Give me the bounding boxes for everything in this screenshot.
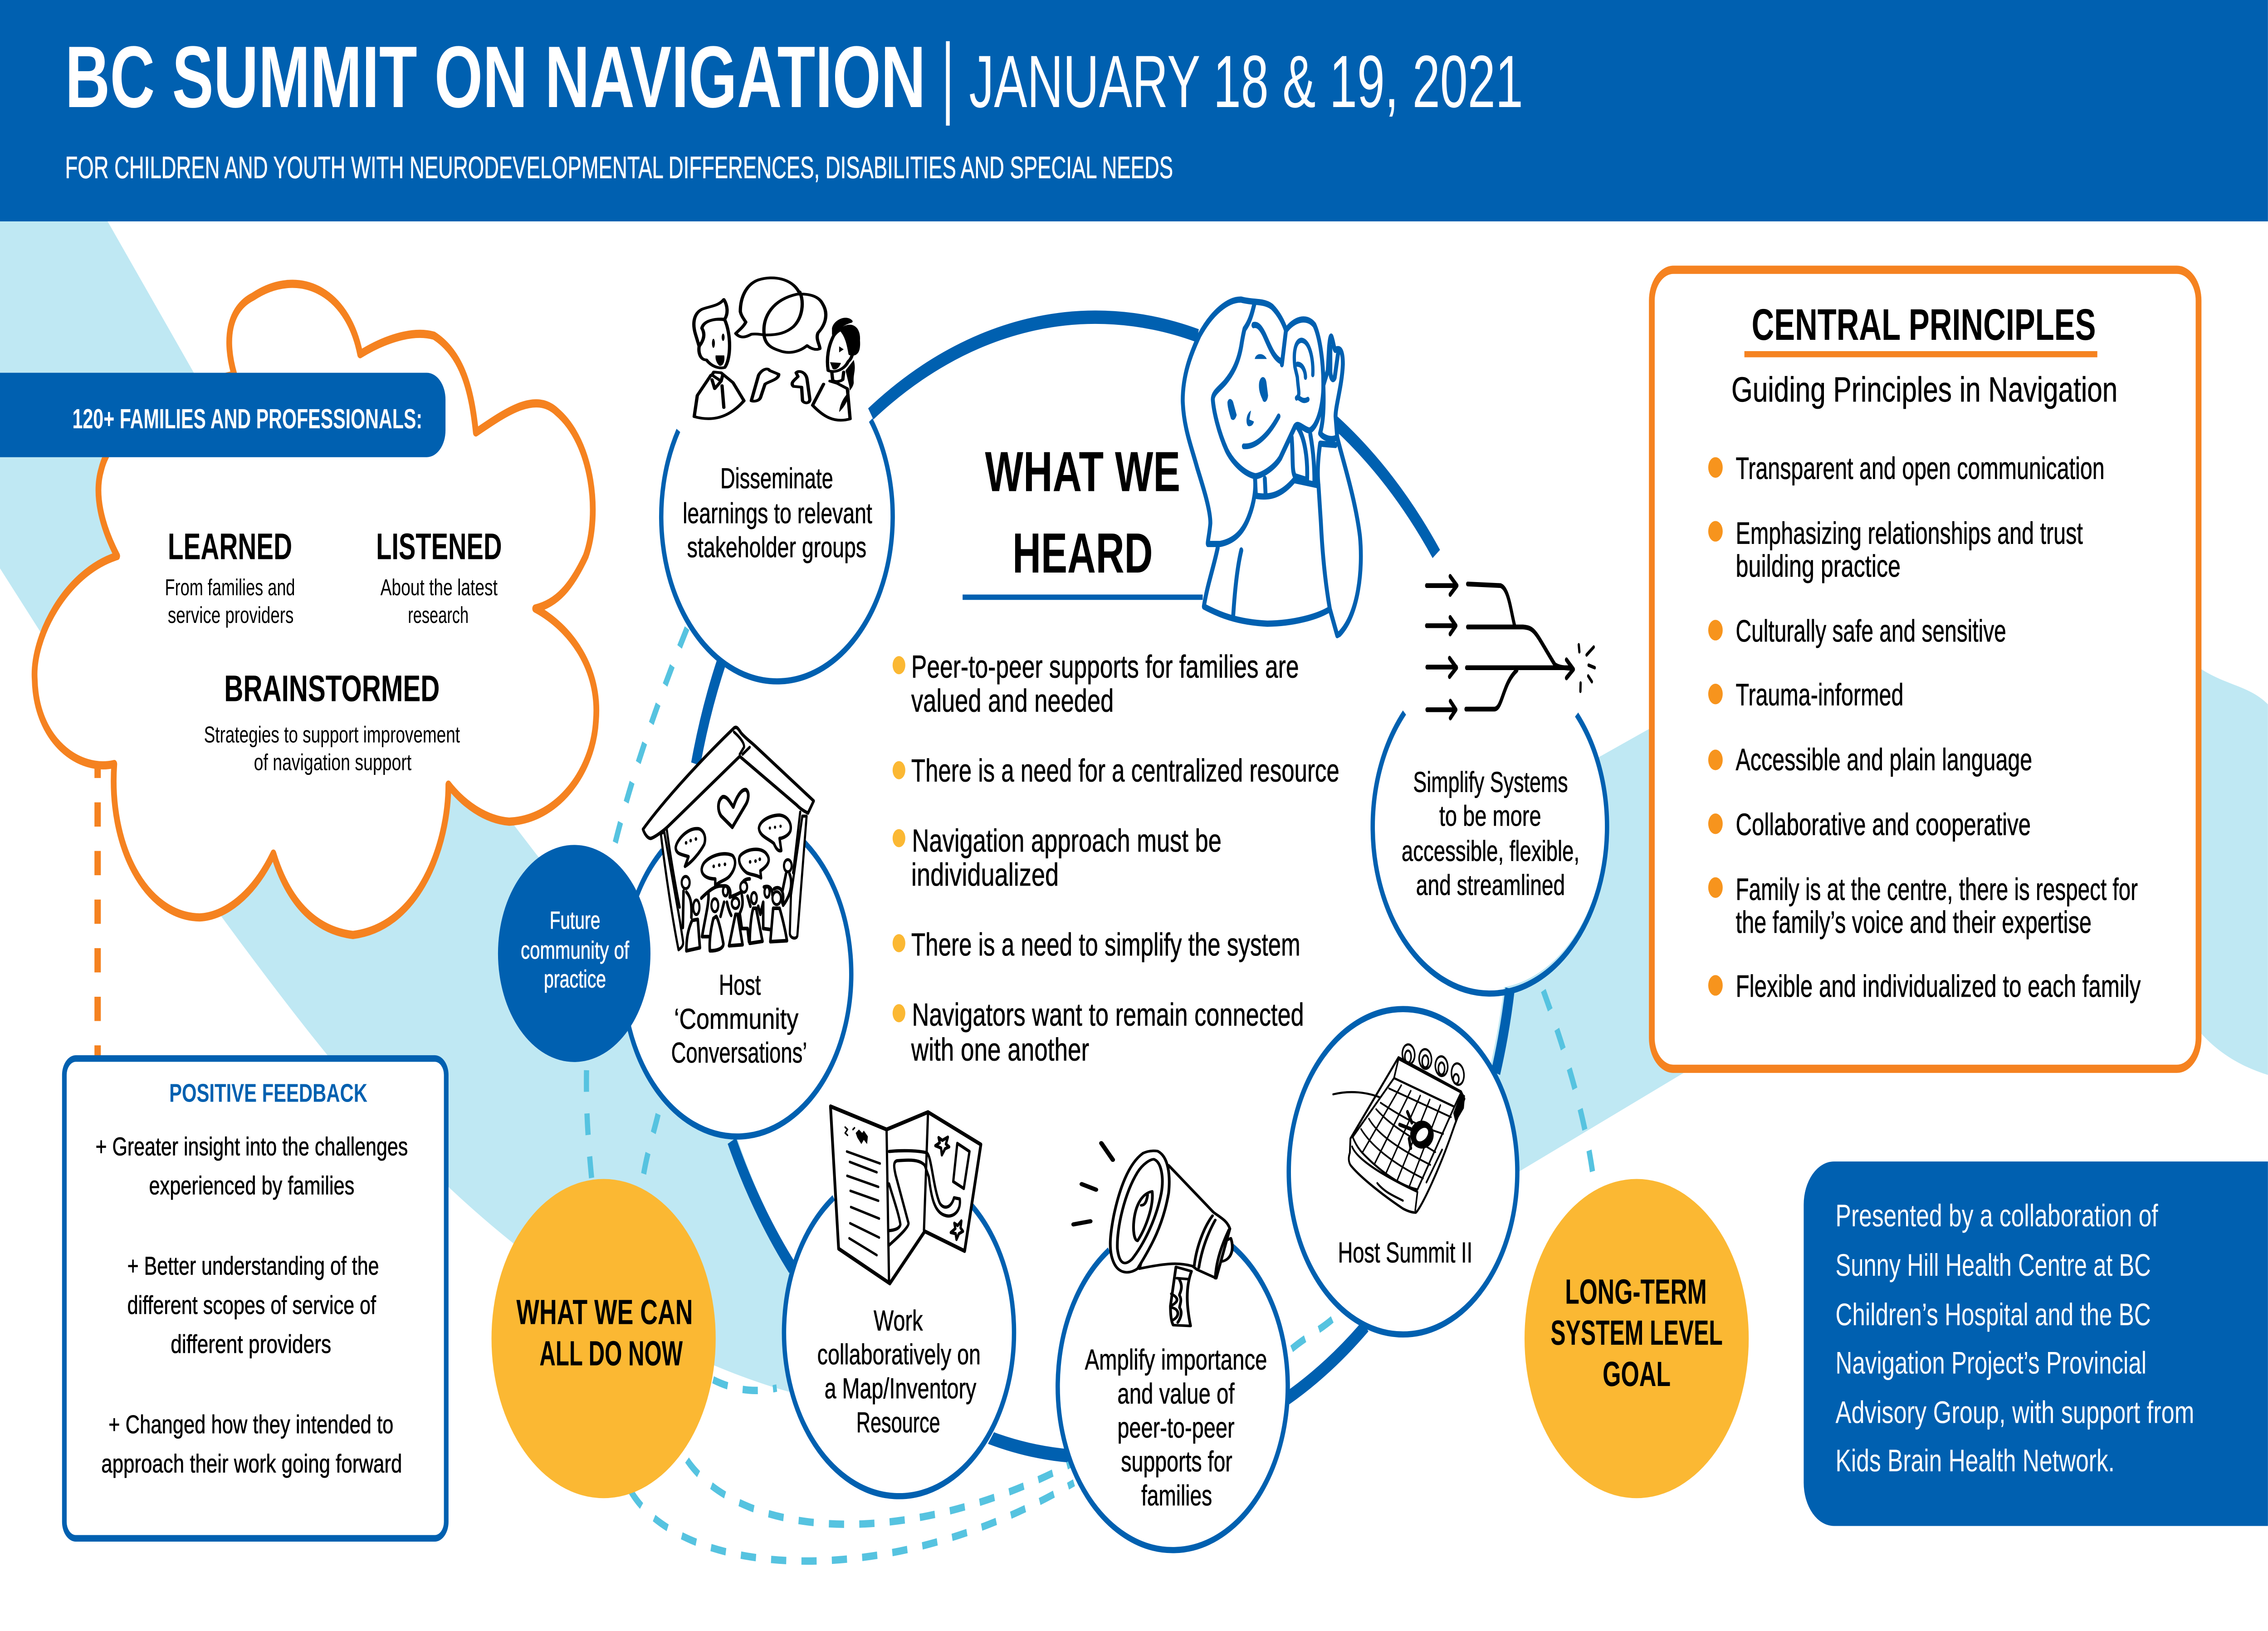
icon: megaphone [1074,1143,1232,1326]
what we heard list: There is a need to simplify the system [911,929,1300,964]
banner: 120+ families: 120+ FAMILIES AND PROFESSIONALS: [72,404,422,435]
what we heard list [893,651,1339,1069]
feedback list [95,1133,408,1479]
node: map resource [784,1107,1015,1502]
icon: calendar [1333,1043,1466,1213]
node: amplify peer supports [1058,1143,1288,1554]
panel: central principles [1652,270,2199,1069]
brainstormed: BRAINSTORMED [224,668,440,710]
map text: Resource [856,1406,940,1439]
panel: presented by: Navigation Project’s Provincial [1836,1347,2146,1382]
principles list: Trauma-informed [1736,679,1903,714]
principles list: Family is at the centre, there is respect for [1736,873,2138,908]
principles list: the family’s voice and their expertise [1736,906,2092,941]
panel: presented by: Children’s Hospital and the BC [1836,1298,2151,1333]
conversations text [671,968,807,1069]
callout: long-term system level goal: SYSTEM LEVEL [1550,1314,1723,1353]
simplify text: and streamlined [1416,868,1565,901]
principles list: building practice [1736,550,1901,585]
principles heading: Guiding Principles in Navigation [1731,371,2117,410]
conversations text: Host [719,968,761,1001]
simplify text: to be more [1439,799,1541,832]
listened: About the latest [381,577,499,601]
panel: presented by [1804,1161,2268,1526]
background swoosh band [0,220,2268,1415]
icon: merging arrows [1427,576,1595,718]
node: future community of practice [498,845,650,1062]
map text: Work [874,1303,924,1337]
conversations text: Conversations’ [671,1036,807,1069]
icon: two people talking [694,278,859,420]
amplify text: families [1141,1479,1212,1512]
summit text: Host Summit II [1338,1235,1472,1269]
simplify text [1402,765,1579,901]
heading: what we heard: WHAT WE [985,440,1180,504]
feedback heading: POSITIVE FEEDBACK [169,1079,367,1108]
callout: long-term system level goal: LONG-TERM [1565,1273,1707,1312]
learned: From families and [165,577,295,601]
header banner [0,0,2268,221]
date: JANUARY 18 & 19, 2021 [969,39,1523,123]
node: simplify systems [1372,576,1607,994]
brainstormed: Strategies to support improvement [204,724,461,749]
callout: long-term system level goal: GOAL [1603,1355,1671,1394]
node: future community of practice: Future [550,906,601,935]
principles list [1708,452,2141,1005]
dashed connectors [587,628,1593,1561]
amplify text [1085,1343,1267,1512]
simplify text: Simplify Systems [1413,765,1568,798]
what we heard list: Peer-to-peer supports for families are [911,651,1299,686]
panel: presented by: Advisory Group, with support from [1836,1396,2194,1431]
listened: LISTENED [376,526,502,568]
principles list: Emphasizing relationships and trust [1736,517,2084,552]
simplify text: accessible, flexible, [1402,834,1579,867]
learned [165,526,295,629]
node: future community of practice: practice [544,965,606,994]
orange dashed connector [97,766,98,1058]
amplify text: supports for [1121,1445,1233,1478]
amplify text: and value of [1117,1376,1235,1410]
map text: a Map/Inventory [825,1371,976,1405]
callout: what we can all do now [492,1179,716,1498]
heading: what we heard [963,440,1202,600]
panel: presented by: Sunny Hill Health Centre at BC [1836,1249,2151,1284]
feedback list: + Better understanding of the [127,1252,379,1281]
title: BC SUMMIT ON NAVIGATION [65,31,926,127]
disseminate text: learnings to relevant [683,496,872,529]
principles list: Transparent and open communication [1736,452,2105,487]
listened: research [408,604,469,629]
feedback list: + Changed how they intended to [108,1411,393,1440]
icon: house with people [643,727,814,951]
principles heading [1731,301,2117,410]
listened [376,526,502,629]
what we heard list: Navigation approach must be [912,825,1222,860]
banner: 120+ families [0,373,445,457]
node: future community of practice: community of [521,936,630,965]
disseminate text: Disseminate [720,461,833,494]
principles list: Accessible and plain language [1736,744,2032,779]
amplify text: peer-to-peer [1117,1411,1235,1444]
principles heading: CENTRAL PRINCIPLES [1752,301,2096,350]
panel: cloud [0,284,596,935]
panel: presented by: Presented by a collaboration of [1836,1200,2159,1234]
central white disc with ring segments [696,309,1510,1466]
principles list: Collaborative and cooperative [1736,808,2031,843]
what we heard list: with one another [910,1034,1089,1069]
panel: presented by: Kids Brain Health Network. [1836,1445,2115,1479]
map text [817,1303,981,1439]
conversations text: ‘Community [674,1002,798,1035]
map text: collaboratively on [817,1337,981,1371]
what we heard list: There is a need for a centralized resource [911,755,1339,790]
feedback list: approach their work going forward [101,1450,402,1479]
icon: woman listening [1183,299,1361,635]
what we heard list: valued and needed [911,685,1114,720]
feedback list: different providers [171,1330,331,1359]
callout: long-term system level goal [1525,1179,1749,1498]
disseminate text: stakeholder groups [687,530,866,563]
feedback list: different scopes of service of [127,1291,377,1320]
brainstormed: of navigation support [254,752,413,776]
callout: what we can all do now: WHAT WE CAN [516,1293,693,1332]
what we heard list: Navigators want to remain connected [912,999,1304,1034]
disseminate text [683,461,872,563]
principles list: Flexible and individualized to each family [1736,970,2141,1005]
node: disseminate [661,278,893,681]
principles list: Culturally safe and sensitive [1736,615,2006,650]
feedback list: experienced by families [149,1172,354,1200]
node: host summit II [1289,1009,1517,1334]
node: community conversations [623,727,853,1139]
what we heard list: individualized [911,859,1059,894]
brainstormed [204,668,461,776]
feedback list: + Greater insight into the challenges [95,1133,408,1161]
heading: what we heard: HEARD [1012,521,1153,585]
subtitle: FOR CHILDREN AND YOUTH WITH NEURODEVELOPMENTAL DIFFERENCES, DISABILITIES AND SPECIAL NEEDS [65,152,1173,186]
learned: LEARNED [168,526,292,568]
panel: positive feedback [64,1058,446,1538]
icon: folded map [831,1107,981,1283]
callout: what we can all do now: ALL DO NOW [539,1334,684,1374]
amplify text: Amplify importance [1085,1343,1267,1376]
learned: service providers [168,604,294,629]
